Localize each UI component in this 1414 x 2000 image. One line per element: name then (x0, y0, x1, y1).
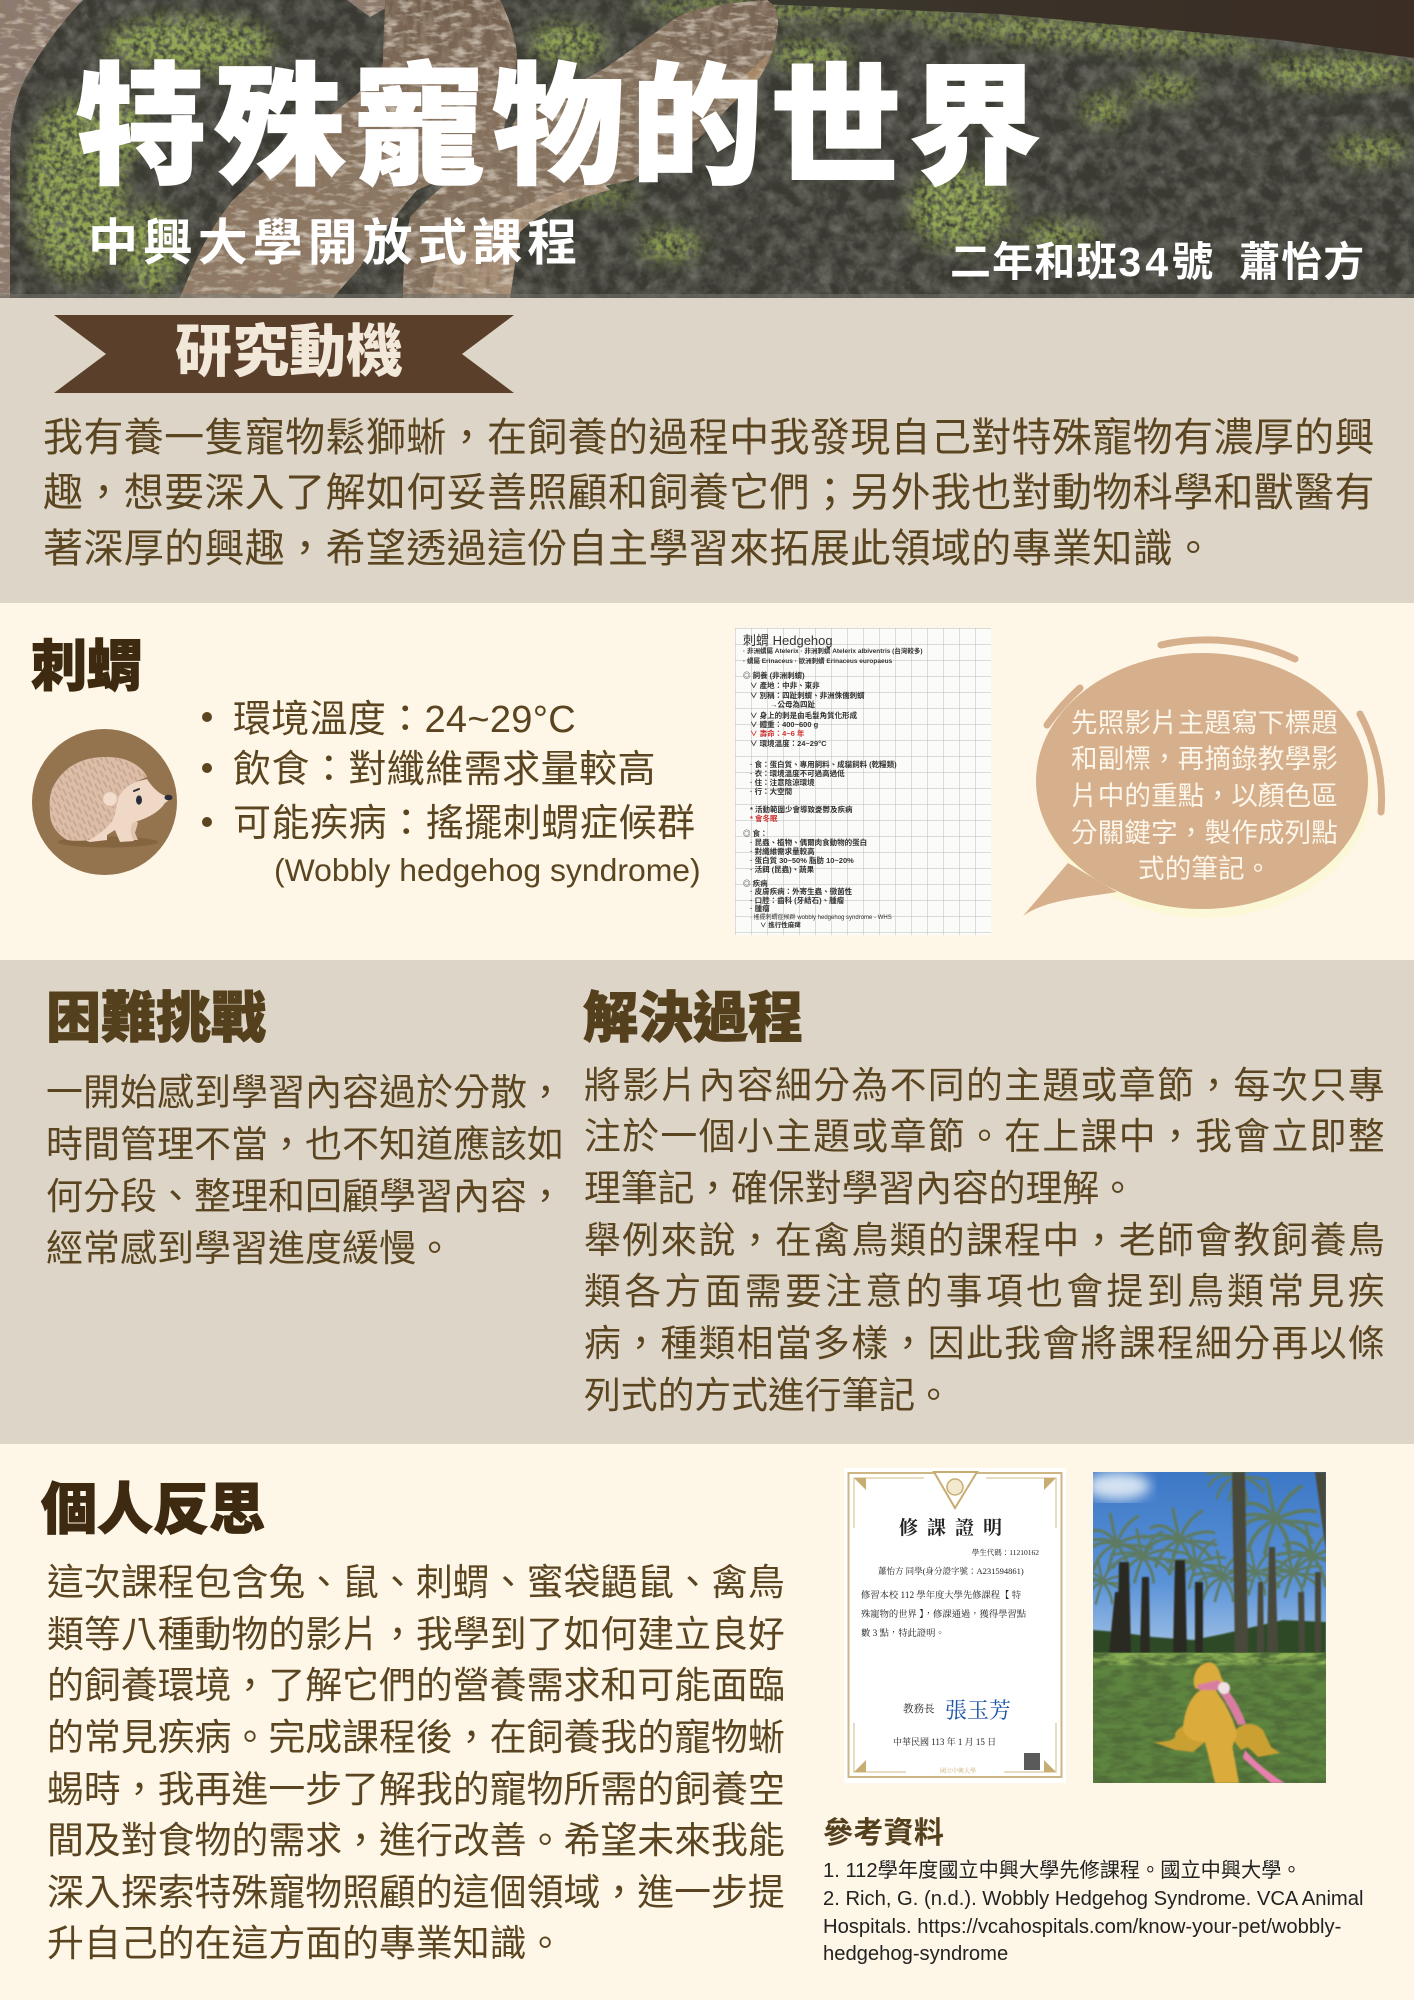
references heading: 參考資料 (823, 1817, 944, 1850)
handwritten notes image (735, 628, 991, 935)
difficulties paragraph (46, 1072, 564, 1269)
heading: hedgehog: 刺蝟 (31, 635, 143, 698)
solutions paragraph: 病，種類相當多樣，因此我會將課程細分再以條 (584, 1323, 1386, 1364)
handwritten notes image: ∨ 進行性麻痺 (760, 920, 801, 929)
bullet dot (202, 817, 212, 827)
heading: solutions: 解決過程 (583, 987, 803, 1049)
handwritten notes image: · 皮膚疾病：外寄生蟲、黴菌性 (750, 886, 853, 896)
certificate image (844, 1468, 1066, 1783)
reflection paragraph: 這次課程包含兔、鼠、刺蝟、蜜袋鼯鼠、禽鳥 (47, 1562, 785, 1603)
reflection paragraph: 蜴時，我再進一步了解我的寵物所需的飼養空 (47, 1769, 785, 1810)
certificate image: 學生代碼：11210162 (972, 1547, 1039, 1557)
handwritten notes image: · 活餌 (昆蟲)、蔬果 (750, 864, 815, 874)
bullet list: care facts: 可能疾病：搖擺刺蝟症候群 (233, 803, 696, 845)
heading ribbon (54, 315, 514, 393)
heading: research motivation: 研究動機 (175, 320, 403, 384)
references: 1. 112學年度國立中興大學先修課程。國立中興大學。 (823, 1860, 1302, 1882)
handwritten notes image: · 非洲蝟屬 Atelerix · 非洲刺蝟 Atelerix albiventris (台灣較多) (743, 646, 923, 655)
bullet list: care facts: (Wobbly hedgehog syndrome) (274, 852, 701, 888)
speech bubble callout: 片中的重點，以顏色區 (1071, 781, 1338, 811)
handwritten notes image: * 活動範圍少會導致憂鬱及疾病 (750, 804, 853, 814)
solutions paragraph: 理筆記，確保對學習內容的理解。 (584, 1168, 1136, 1209)
certificate image: 修課證明 (899, 1517, 1011, 1539)
certificate image: 蕭怡方 同學(身分證字號：A231594861) (878, 1566, 1024, 1576)
panel: difficulties and solutions (0, 960, 1414, 1444)
difficulties paragraph: 何分段、整理和回顧學習內容， (46, 1176, 564, 1217)
solutions paragraph: 列式的方式進行筆記。 (584, 1375, 952, 1416)
motivation paragraph: 著深厚的興趣，希望透過這份自主學習來拓展此領域的專業知識。 (43, 527, 1213, 571)
handwritten notes image: ∨ 體重：400~600 g (750, 719, 819, 729)
certificate image: 殊寵物的世界 】，修課通過，獲得學習點 (861, 1608, 1026, 1620)
handwritten notes image: · 蛋白質 30~50% 脂肪 10~20% (750, 855, 854, 865)
certificate image: 修習本校 112 學年度大學先修課程【 特 (861, 1589, 1022, 1601)
panel: hero header (0, 0, 1414, 298)
reflection paragraph: 的飼養環境，了解它們的營養需求和可能面臨 (47, 1665, 785, 1706)
solutions paragraph: 將影片內容細分為不同的主題或章節，每次只專 (584, 1065, 1386, 1106)
bullet list: care facts: 飲食：對纖維需求量較高 (233, 749, 656, 791)
certificate image: 國立中興大學 (940, 1767, 976, 1775)
reflection paragraph: 間及對食物的需求，進行改善。希望未來我能 (47, 1820, 785, 1861)
handwritten notes image: ◎ 食： (743, 828, 768, 838)
handwritten notes image: * 會冬眠 (750, 813, 778, 823)
difficulties paragraph: 時間管理不當，也不知道應該如 (46, 1124, 564, 1165)
handwritten notes image: ∨ 身上的刺是由毛髮角質化形成 (750, 710, 858, 720)
reflection paragraph: 的常見疾病。完成課程後，在飼養我的寵物蜥 (47, 1717, 785, 1758)
bullet dot (202, 712, 212, 722)
speech bubble callout: 式的筆記。 (1138, 854, 1272, 884)
panel: personal reflection and references (0, 1444, 1414, 2000)
references (823, 1817, 1363, 1965)
handwritten notes image: · 搖擺刺蝟症候群 wobbly hedgehog syndrome - WHS (750, 913, 892, 921)
solutions paragraph: 注於一個小主題或章節。在上課中，我會立即整 (584, 1116, 1386, 1157)
handwritten notes image: · 口腔：齒科 (牙結石)、腫瘤 (750, 895, 845, 905)
references: Hospitals. https://vcahospitals.com/know-your-pet/wobbly- (823, 1916, 1341, 1938)
motivation paragraph: 我有養一隻寵物鬆獅蜥，在飼養的過程中我發現自己對特殊寵物有濃厚的興 (43, 416, 1375, 460)
reflection paragraph (47, 1562, 785, 1964)
reflection paragraph: 深入探索特殊寵物照顧的這個領域，進一步提 (47, 1872, 785, 1913)
difficulties paragraph: 一開始感到學習內容過於分散， (46, 1072, 564, 1113)
bullet list: care facts (202, 699, 701, 888)
handwritten notes image: ◎ 飼養 (非洲刺蝟) (743, 670, 805, 680)
heading: reflection: 個人反思 (41, 1478, 265, 1541)
handwritten notes image: · 腫瘤 (750, 903, 770, 913)
speech bubble callout: 分關鍵字，製作成列點 (1071, 818, 1338, 848)
bullet list: care facts: 環境溫度：24~29°C (233, 699, 576, 741)
bubble shape (1023, 636, 1385, 918)
handwritten notes image: · 對纖維需求量較高 (750, 846, 815, 856)
motivation paragraph (43, 416, 1375, 571)
reflection paragraph: 升自己的在這方面的專業知識。 (47, 1923, 563, 1964)
handwritten notes image: · 衣：環境溫度不可過高過低 (750, 768, 845, 778)
handwritten notes image: · 蝟屬 Erinaceus · 歐洲刺蝟 Erinaceus europaeus (743, 656, 893, 665)
certificate image: 張玉芳 (945, 1698, 1011, 1723)
speech bubble callout: 先照影片主題寫下標題 (1071, 708, 1338, 738)
author: 二年和班34號 蕭怡方 (950, 239, 1365, 285)
certificate image: 中華民國 113 年 1 月 15 日 (893, 1736, 996, 1747)
panel: hedgehog (0, 603, 1414, 960)
icon: hedgehog (32, 729, 177, 875)
handwritten notes image: →公母為四趾 (770, 699, 815, 709)
handwritten notes image: ◎ 疾病 (743, 878, 768, 888)
handwritten notes image: ∨ 壽命：4~6 年 (750, 728, 805, 738)
handwritten notes image: · 住：注意陰涼環境 (750, 777, 815, 787)
solutions paragraph: 舉例來說，在禽鳥類的課程中，老師會教飼養鳥 (584, 1220, 1386, 1261)
handwritten notes image: · 昆蟲、植物、偶爾肉食動物的蛋白 (750, 837, 867, 847)
solutions paragraph (584, 1065, 1388, 1416)
solutions paragraph: 類各方面需要注意的事項也會提到鳥類常見疾 (584, 1271, 1388, 1312)
references: hedgehog-syndrome (823, 1943, 1008, 1965)
handwritten notes image: ∨ 產地：中非、東非 (750, 680, 820, 690)
references: 2. Rich, G. (n.d.). Wobbly Hedgehog Syndrome. VCA Animal (823, 1888, 1363, 1910)
handwritten notes image: 刺蝟 Hedgehog (743, 633, 833, 648)
panel: research motivation (0, 298, 1414, 603)
speech bubble callout: 和副標，再摘錄教學影 (1071, 744, 1338, 774)
heading: difficulties: 困難挑戰 (46, 987, 266, 1049)
handwritten notes image: · 行：大空間 (750, 786, 792, 796)
certificate image: 數 3 點，特此證明。 (861, 1627, 945, 1639)
difficulties paragraph: 經常感到學習進度緩慢。 (46, 1228, 453, 1269)
reflection paragraph: 類等八種動物的影片，我學到了如何建立良好 (47, 1614, 785, 1655)
bullet dot (202, 763, 212, 773)
certificate image: 教務長 (903, 1702, 935, 1715)
lizard photo (1093, 1472, 1326, 1783)
handwritten notes image: ∨ 環境溫度：24~29°C (750, 738, 827, 748)
subtitle: course name: 中興大學開放式課程 (88, 215, 582, 271)
handwritten notes image: ∨ 別稱：四趾刺蝟、非洲侏儒刺蝟 (750, 690, 865, 700)
motivation paragraph: 趣，想要深入了解如何妥善照顧和飼養它們；另外我也對動物科學和獸醫有 (43, 471, 1375, 515)
hero photo: snake on mossy rock (0, 0, 1414, 892)
handwritten notes image: · 食：蛋白質、專用飼料、成貓飼料 (乾糧類) (750, 759, 897, 769)
title: 特殊寵物的世界 (75, 54, 1048, 201)
speech bubble callout (1023, 636, 1385, 918)
